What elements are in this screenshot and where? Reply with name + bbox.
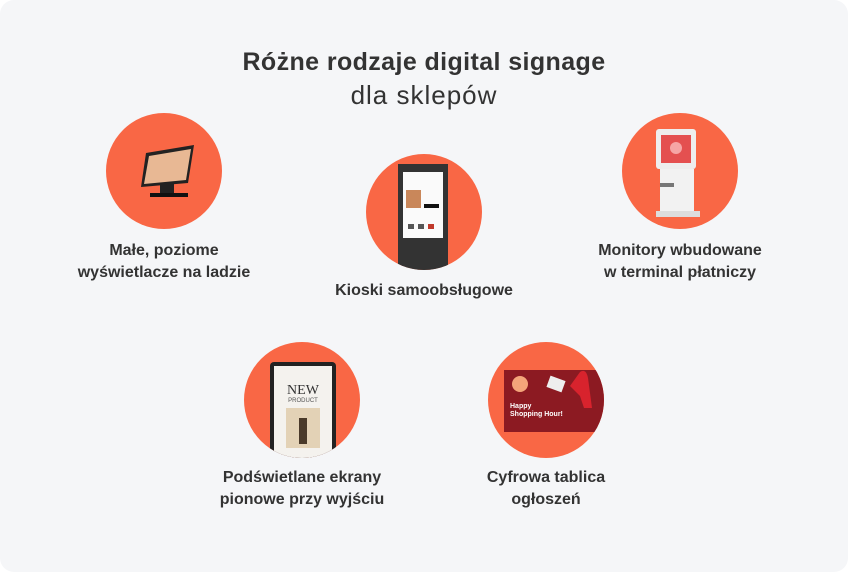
icon: vertical screen: NEW <box>287 383 320 398</box>
label: vertical screens: Podświetlane ekrany <box>223 469 381 486</box>
label: terminal monitors: w terminal płatniczy <box>604 264 756 281</box>
label: kiosks: Kioski samoobsługowe <box>335 282 513 299</box>
icon: digital board: Happy <box>510 403 532 410</box>
icon: kiosk <box>366 154 482 270</box>
title: Różne rodzaje digital signage <box>242 48 606 76</box>
label: digital board <box>487 469 606 508</box>
label: counter displays: Małe, poziome <box>109 242 219 259</box>
label: vertical screens <box>220 469 384 508</box>
icon: vertical screen: PRODUCT <box>288 398 318 404</box>
icon: digital board <box>488 342 604 458</box>
title: dla sklepów <box>351 80 497 110</box>
icon: payment terminal <box>622 113 738 229</box>
icon: vertical screen <box>244 342 360 458</box>
label: digital board: Cyfrowa tablica <box>487 469 605 486</box>
label: digital board: ogłoszeń <box>511 491 581 508</box>
label: terminal monitors <box>598 242 762 281</box>
label: counter displays <box>78 242 250 281</box>
label: vertical screens: pionowe przy wyjściu <box>220 491 384 508</box>
label: counter displays: wyświetlacze na ladzie <box>78 264 250 281</box>
icon: counter display <box>106 113 222 229</box>
label: terminal monitors: Monitory wbudowane <box>598 242 762 259</box>
icon: digital board: Shopping Hour! <box>510 411 563 418</box>
title <box>242 48 606 110</box>
